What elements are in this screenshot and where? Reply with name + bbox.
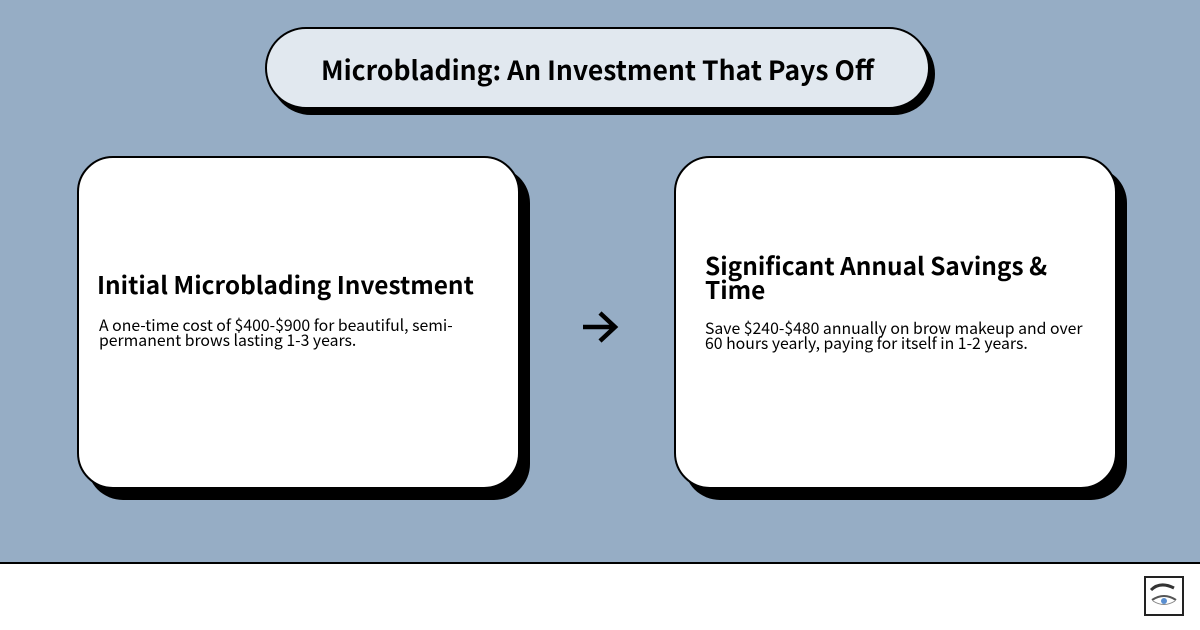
- panel: initial investment: [77, 156, 520, 489]
- title: Microblading: An Investment That Pays Off: [321, 48, 874, 88]
- footer: [0, 562, 1200, 630]
- heading: annual savings: Significant Annual Savings & Time: [705, 248, 1047, 307]
- panel: annual savings: [674, 156, 1117, 489]
- icon: eye logo: [1144, 576, 1184, 616]
- arrow: [583, 311, 618, 343]
- title: [265, 27, 930, 109]
- heading: initial investment: Initial Microblading Investment: [97, 267, 474, 302]
- text: initial investment: A one-time cost of $400-$900 for beautiful, semi-permanent brows lasting 1-3 years.: [99, 313, 453, 351]
- text: annual savings: Save $240-$480 annually on brow makeup and over 60 hours yearly, paying for itself in 1-2 years.: [705, 316, 1083, 354]
